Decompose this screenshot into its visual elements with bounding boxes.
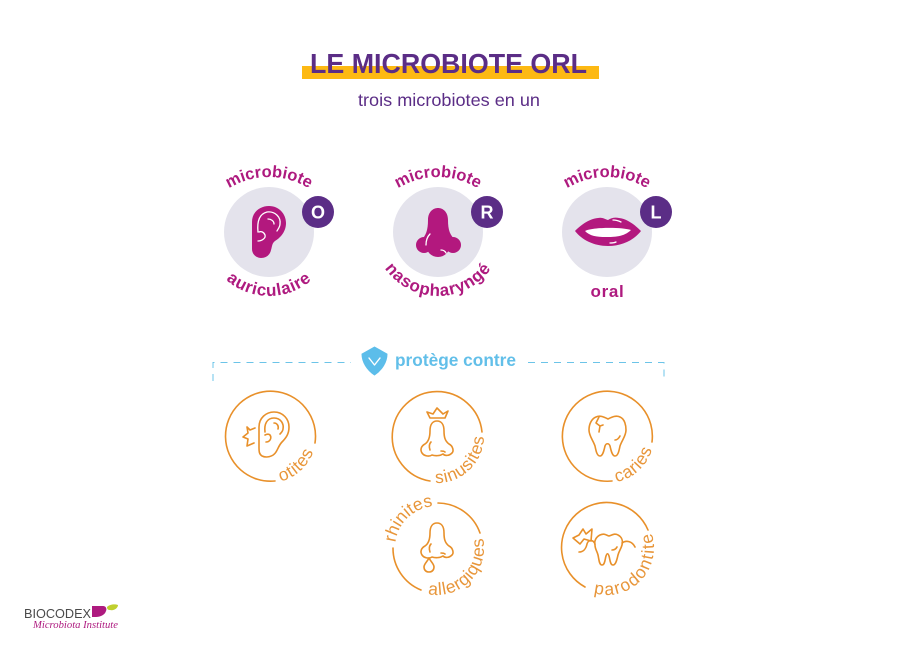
label: nasopharyngé: nasopharyngé xyxy=(385,262,490,298)
panel: parodontite xyxy=(560,502,654,598)
panel: microbiote oral xyxy=(562,165,672,301)
dashed bracket xyxy=(213,362,664,381)
icon: nose xyxy=(416,208,461,257)
icon: ear with pain xyxy=(243,412,289,457)
icon: cracked tooth xyxy=(589,416,626,456)
label: parodontite: parodontite xyxy=(594,534,654,598)
subtitle: trois microbiotes en un xyxy=(358,90,540,110)
badge: L: L xyxy=(650,202,662,222)
label: oral: oral xyxy=(591,282,624,301)
label: microbiote top: microbiote xyxy=(226,165,312,188)
badge: R: R xyxy=(480,202,494,222)
label: caries: caries xyxy=(616,448,652,482)
label: auriculaire: auriculaire xyxy=(227,274,310,296)
panel: microbiote nasopharyngé xyxy=(385,165,503,298)
label: microbiote right: microbiote xyxy=(564,165,650,188)
icon: nose with crown xyxy=(421,408,453,456)
panel: rhinites allergiques xyxy=(385,498,484,596)
icon: lips xyxy=(575,218,641,246)
panel: otites xyxy=(224,390,316,482)
logo: Biocodex Microbiota Institute xyxy=(24,604,118,631)
heading: protège contre: protège contre xyxy=(395,350,516,370)
panel: sinusites xyxy=(391,390,484,484)
title: LE MICROBIOTE ORL xyxy=(310,48,587,79)
icon: tooth with gum pain xyxy=(573,529,635,565)
panel: microbiote auriculaire xyxy=(224,165,334,296)
label: sinusites: sinusites xyxy=(436,436,484,484)
icon: runny nose xyxy=(421,523,453,572)
logo: Biocodex Microbiota Institute: Microbiota Institute xyxy=(32,620,118,631)
label: allergiques: allergiques xyxy=(428,539,484,596)
icon: shield xyxy=(362,347,387,375)
label: otites: otites xyxy=(279,450,312,480)
label: microbiote middle: microbiote xyxy=(394,165,480,188)
icon: ear xyxy=(252,206,286,258)
logo: Biocodex Microbiota Institute: BIOCODEX xyxy=(24,606,91,621)
label: rhinites: rhinites xyxy=(385,498,432,542)
badge: O: O xyxy=(311,202,325,222)
panel: caries xyxy=(562,390,654,482)
